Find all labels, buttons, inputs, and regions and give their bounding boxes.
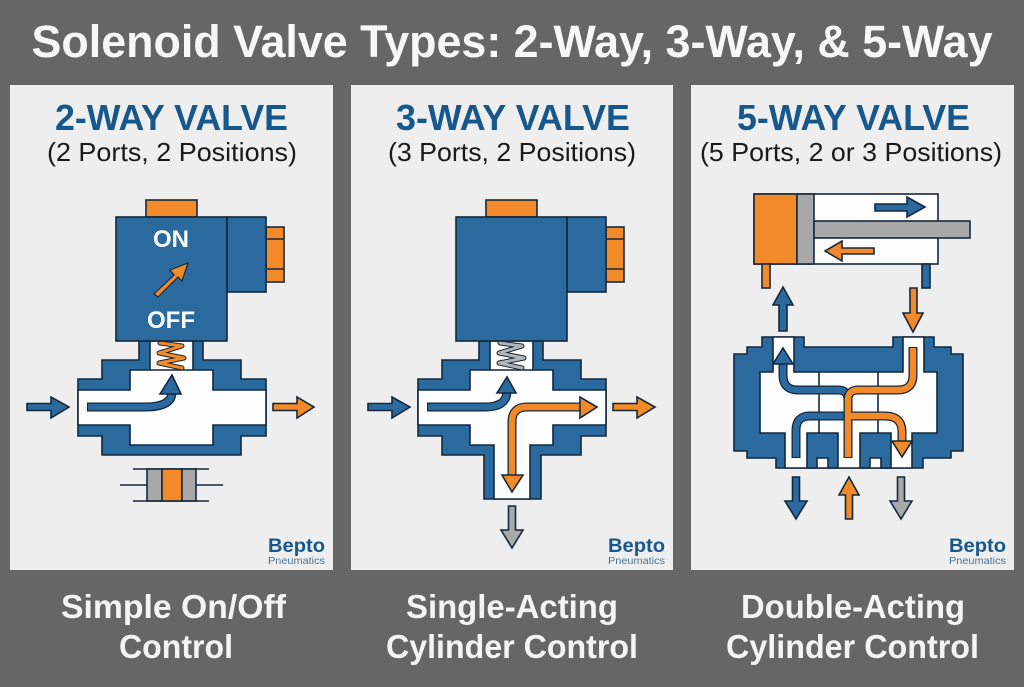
internal flow: orange (848, 347, 913, 458)
label: off: OFF (147, 307, 195, 334)
panel: 2-way valve (10, 85, 333, 570)
cylinder (754, 194, 970, 288)
solenoid coil (116, 200, 284, 341)
logo (268, 536, 325, 567)
flow arrow: outlet (613, 397, 655, 418)
valve body (78, 341, 266, 455)
valve body (734, 337, 963, 468)
logo: Bepto (268, 536, 325, 557)
port: right (922, 264, 930, 288)
logo: Bepto (608, 536, 665, 557)
subheading: 5 ports: (5 Ports, 2 or 3 Positions) (700, 137, 1002, 167)
label: on: ON (153, 226, 189, 253)
logo (608, 536, 665, 567)
arrow: retract (825, 241, 874, 261)
spring (490, 343, 533, 370)
caption: 5-way: Cylinder Control (726, 628, 979, 665)
heading: 3-way valve: 3-WAY VALVE (396, 97, 630, 138)
logo: Pneumatics (268, 555, 325, 567)
caption: 2-way (61, 588, 287, 665)
flow arrow: blue exhaust (785, 477, 807, 519)
flow arrow: internal (87, 375, 181, 407)
flow arrow: exhaust (501, 506, 523, 548)
spring (150, 343, 193, 370)
valve blocks (807, 433, 838, 468)
caption: 3-way: Cylinder Control (386, 628, 638, 665)
internal flow: blue (773, 348, 848, 458)
heading: 2-way valve: 2-WAY VALVE (55, 97, 288, 138)
arrow: extend (875, 197, 925, 217)
caption: 2-way: Control (119, 628, 233, 665)
caption: 3-way: Single-Acting (406, 588, 618, 625)
subheading: 3 ports: (3 Ports, 2 Positions) (388, 137, 636, 167)
flow arrow: up to cylinder (773, 287, 793, 331)
caption: 5-way: Double-Acting (741, 588, 965, 625)
flow arrow: inlet (27, 397, 69, 418)
flow arrow: internal orange (502, 397, 597, 492)
caption: 3-way (386, 588, 638, 665)
icon: switch arrow (154, 263, 188, 297)
caption: 5-way (726, 588, 979, 665)
flow arrow: internal blue (427, 377, 516, 407)
flow arrow: down from cylinder (903, 288, 923, 332)
panel: 5-way valve (691, 85, 1014, 570)
flow arrow: gray exhaust (890, 477, 912, 519)
logo: Pneumatics (949, 555, 1006, 567)
logo (949, 536, 1006, 567)
panel: 3-way valve (351, 85, 673, 570)
flow arrow: outlet (273, 397, 314, 418)
flow arrow: orange supply (839, 477, 859, 519)
title: Solenoid Valve Types: 2-Way, 3-Way, & 5-Way (32, 16, 992, 67)
subheading: 2 ports: (2 Ports, 2 Positions) (47, 137, 297, 167)
solenoid coil (456, 200, 624, 341)
flow arrow: inlet (368, 397, 410, 418)
valve body (418, 341, 606, 499)
symbol: valve block (120, 469, 223, 501)
caption: 2-way: Simple On/Off (61, 588, 287, 625)
logo: Pneumatics (608, 555, 665, 567)
heading: 5-way valve: 5-WAY VALVE (737, 97, 970, 138)
port: left (762, 264, 770, 288)
logo: Bepto (949, 536, 1006, 557)
